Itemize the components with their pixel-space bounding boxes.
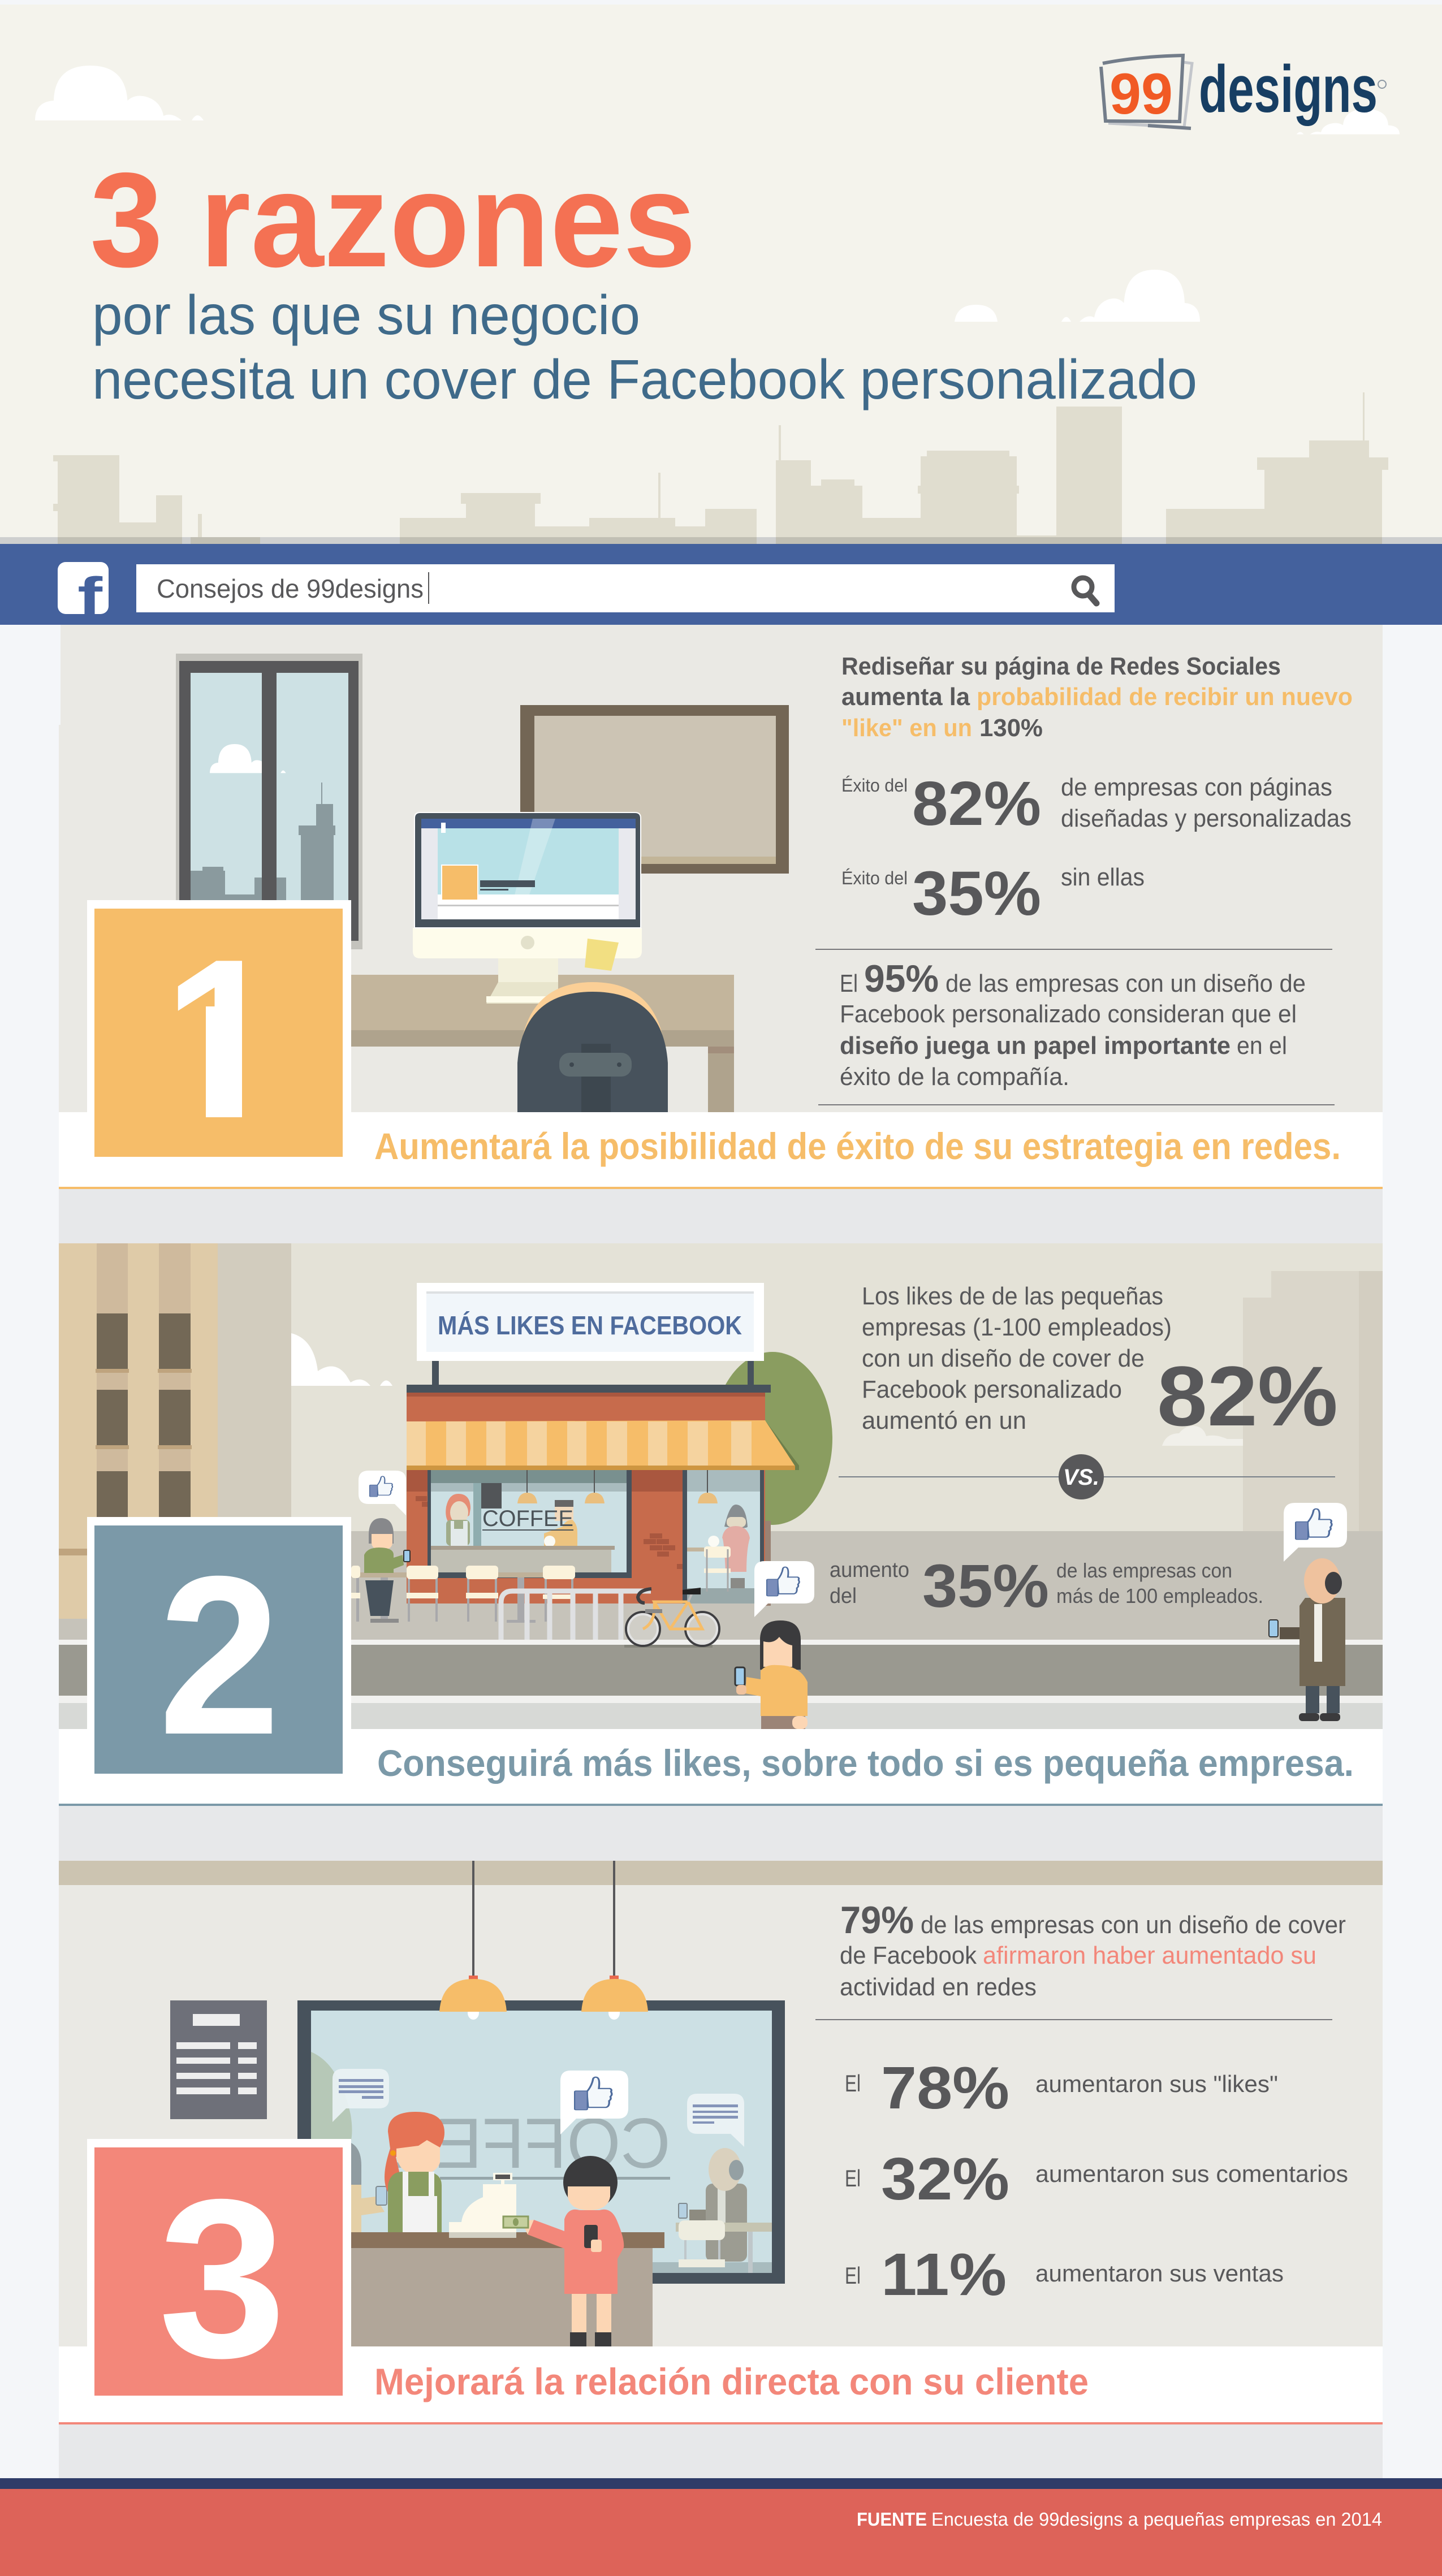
customer (503, 2156, 624, 2346)
stat: 32% (845, 2146, 1348, 2212)
sign: más likes: MÁS LIKES EN FACEBOOK (438, 1311, 742, 1340)
stat: 35%: sin ellas (1061, 863, 1145, 891)
text block: 79%: de las empresas con un diseño de cover (921, 1911, 1346, 1939)
panel: reason 3 (59, 1861, 1383, 2346)
title: 3 razones (90, 145, 696, 295)
stat: 11%: El (845, 2262, 861, 2289)
person with phone: man (1269, 1503, 1347, 1721)
banner: reason 3 (59, 2346, 1383, 2424)
logo: 99designs (1101, 52, 1386, 128)
facebook search bar (0, 544, 1442, 627)
icon: facebook: f (77, 567, 103, 627)
text block: 79%: afirmaron haber aumentado su (983, 1942, 1316, 1969)
icon: facebook (58, 562, 109, 627)
text block: small business: aumentó en un (862, 1407, 1026, 1434)
clouds (35, 66, 1400, 322)
bike rack (501, 1591, 651, 1640)
patron at left (351, 2143, 387, 2232)
stat: 11% (845, 2241, 1284, 2308)
subtitle: por las que su negocio (92, 284, 640, 346)
stat: 32%: El (845, 2165, 861, 2192)
cash register (449, 2173, 516, 2238)
patron at right (676, 2148, 772, 2273)
number box 1: 1 (163, 912, 286, 1166)
text block: 79%: 79% (840, 1899, 914, 1942)
subtitle: necesita un cover de Facebook personalizado (92, 348, 1197, 410)
left building (59, 1243, 291, 1619)
footer (0, 2478, 1442, 2576)
COFFEE window text: COFFEE (482, 1506, 573, 1531)
stat: 32%: 32% (881, 2146, 1009, 2212)
stat: 35% (841, 859, 1145, 928)
number box 1 (87, 900, 351, 1166)
subtitle (92, 284, 1197, 410)
speech bubble: right (687, 2094, 744, 2147)
stat: 78%: 78% (881, 2055, 1009, 2121)
background buildings (291, 1271, 1383, 1537)
text block: small business: empresas (1-100 empleados) (862, 1313, 1172, 1341)
text block: 95%: El (840, 970, 858, 997)
stat: 11%: 11% (881, 2241, 1007, 2308)
text block: 79% (840, 1899, 1346, 2001)
text block: small business (862, 1282, 1172, 1434)
speech bubble: like (359, 1471, 406, 1515)
chair (517, 982, 668, 1112)
headline 3: Mejorará la relación directa con su cliente (374, 2361, 1089, 2402)
picture frame (520, 705, 789, 874)
gap band 2 (59, 1806, 1383, 1861)
text block: redesign: Rediseñar su página de Redes Sociales (841, 652, 1281, 680)
stat: 82%: 82% (912, 769, 1041, 839)
versus divider: VS. (1063, 1465, 1099, 1490)
gap band 1 (59, 1189, 1383, 1243)
stat: 82% (841, 769, 1352, 839)
stat: 82%: 82% (1157, 1348, 1338, 1443)
text block: 79%: de Facebook (840, 1942, 977, 1969)
desk (351, 975, 734, 1112)
text block: small business: con un diseño de cover de (862, 1345, 1145, 1372)
roof (407, 1385, 771, 1393)
coffee shop (407, 1385, 799, 1603)
number box 3: 3 (158, 2152, 286, 2405)
text block: 79%: actividad en redes (840, 1973, 1037, 2001)
shop window (428, 1470, 632, 1578)
ceiling lamps (517, 1470, 718, 1503)
stat: 35%: 35% (912, 859, 1041, 928)
stat: 82%: diseñadas y personalizadas (1061, 805, 1352, 832)
icon: search (1074, 578, 1096, 603)
text block: 95%: éxito de la compañía. (840, 1063, 1069, 1091)
stat: 35%: más de 100 empleados. (1056, 1584, 1263, 1607)
search box (136, 564, 1115, 612)
source note: FUENTE (857, 2509, 927, 2530)
speech bubble: like (754, 1561, 814, 1617)
stat: 11%: aumentaron sus ventas (1035, 2260, 1284, 2287)
panel: reason 1 (59, 625, 1383, 1112)
text block: redesign (841, 652, 1353, 742)
text block: small business: Los likes de de las pequeñas (862, 1282, 1163, 1310)
window scene (176, 654, 362, 949)
number box 2: 2 (158, 1529, 280, 1782)
stat: 35%: 35% (922, 1551, 1049, 1620)
counter (351, 2232, 664, 2346)
panel: reason 2 (59, 1243, 1383, 1729)
source note: Encuesta de 99designs a pequeñas empresas en 2014 (931, 2509, 1382, 2530)
stat: 32%: aumentaron sus comentarios (1035, 2160, 1348, 2187)
stat: 35%: del (830, 1584, 857, 1608)
stat: 35%: de las empresas con (1056, 1559, 1232, 1582)
text block: 95% (840, 957, 1306, 1091)
text block: redesign: "like" en un (841, 714, 972, 742)
bicycle (624, 1588, 719, 1648)
banner: reason 1 (59, 1112, 1383, 1189)
door (683, 1470, 764, 1603)
stat: 35% (830, 1551, 1263, 1620)
gap band 3 (59, 2424, 1383, 2478)
cafe window (297, 2000, 785, 2284)
headline 1: Aumentará la posibilidad de éxito de su estrategia en redes. (374, 1125, 1341, 1167)
text block: 95%: diseño juega un papel importante (840, 1032, 1231, 1060)
text block: 95%: de las empresas con un diseño de (945, 970, 1306, 997)
stat: 82%: Éxito del (841, 775, 908, 796)
ground (59, 1531, 1383, 1729)
person with phone: green (359, 1471, 410, 1623)
number box 2 (87, 1517, 351, 1783)
speech bubble: like (560, 2071, 628, 2134)
text block: 95%: en el (1237, 1032, 1287, 1060)
stat: 78%: El (845, 2070, 861, 2097)
person with phone: girl (735, 1561, 814, 1729)
text block: small business: Facebook personalizado (862, 1376, 1122, 1403)
number box 3 (87, 2139, 351, 2405)
outdoor furniture (351, 1566, 575, 1623)
speech bubble: like (1284, 1503, 1347, 1562)
stat: 78%: aumentaron sus "likes" (1035, 2071, 1278, 2097)
versus divider (839, 1454, 1335, 1499)
text block: 95%: 95% (864, 957, 939, 1000)
mirrored COFFEE text: COFFEE (390, 2104, 671, 2183)
banner: reason 2 (59, 1729, 1383, 1806)
speech bubble: left (333, 2069, 389, 2122)
awning (407, 1420, 799, 1470)
logo: 99designs: 99 (1109, 62, 1173, 126)
barista (385, 2112, 444, 2232)
headline 2: Conseguirá más likes, sobre todo si es pequeña empresa. (377, 1742, 1354, 1784)
menu board (170, 2000, 267, 2119)
text block: redesign: probabilidad de recibir un nuevo (977, 683, 1353, 711)
header panel (0, 5, 1442, 544)
search text: Consejos de 99designs (157, 574, 424, 603)
text block: redesign: aumenta la (841, 683, 970, 711)
tree (713, 1352, 832, 1606)
computer monitor (413, 812, 642, 1004)
text block: redesign: 130% (979, 714, 1043, 742)
text block: 95%: Facebook personalizado consideran que el (840, 1000, 1297, 1028)
stat: 35%: aumento (830, 1558, 909, 1582)
stat: 35%: Éxito del (841, 868, 908, 888)
bricks (416, 1496, 683, 1569)
ceiling lamps (439, 1861, 648, 2020)
stat: 78% (845, 2055, 1278, 2121)
skyline (53, 392, 1388, 544)
stat: 82%: de empresas con páginas (1061, 773, 1332, 801)
sign: más likes (417, 1283, 764, 1385)
